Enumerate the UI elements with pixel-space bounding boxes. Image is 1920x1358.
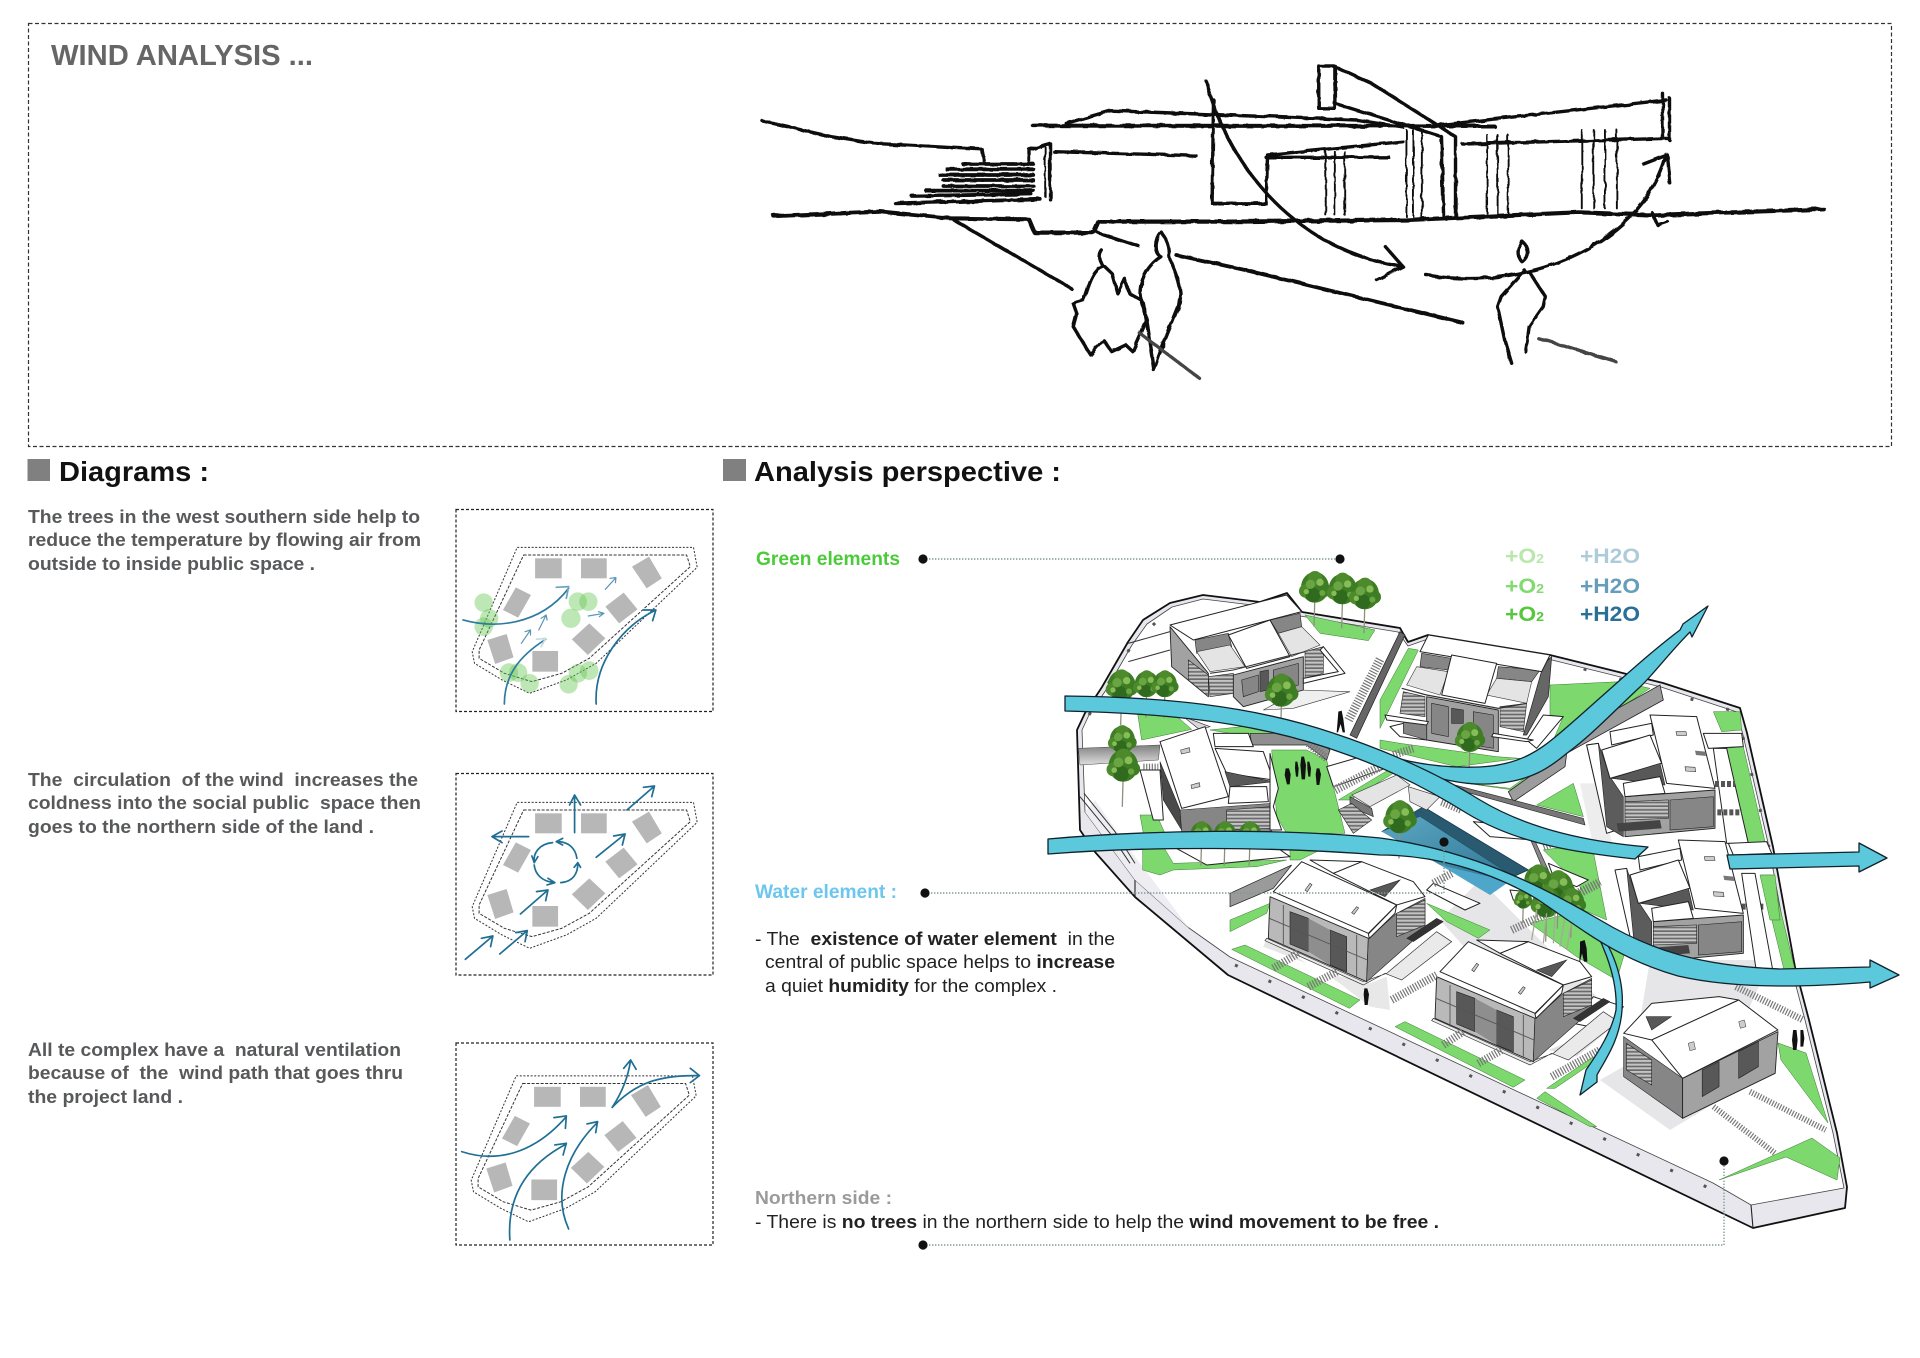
leader: northern side (918, 1156, 1729, 1250)
text block: water element description: - The existence of water element in the (755, 928, 1115, 949)
diagram 3 wind arrows (462, 1060, 699, 1240)
right side green strips (1719, 875, 1840, 1180)
plaza slabs (1327, 752, 1410, 833)
text block: circulation: coldness into the social public space then (28, 793, 421, 813)
label: northern side: Northern side : (755, 1187, 892, 1208)
stairs (1348, 659, 1380, 721)
heading icon: analysis square (723, 459, 746, 481)
wind ribbon: branch to lower centre (1580, 910, 1622, 1095)
greens (1137, 615, 1393, 875)
panel: wind analysis sketch frame (28, 24, 1892, 446)
label: water element: Water element : (755, 881, 897, 903)
text block: circulation: The circulation of the wind increases the (28, 770, 418, 790)
leader: water element (920, 837, 1449, 898)
text block: trees: outside to inside public space . (28, 554, 315, 574)
pool (1382, 807, 1528, 895)
house 2 (1385, 635, 1563, 775)
ground shadows (1085, 800, 1770, 1130)
house 3 (1140, 727, 1290, 865)
paths right of houses (1703, 733, 1773, 973)
text block: circulation: goes to the northern side of the land . (28, 817, 374, 837)
panel: diagram 3 ventilation (456, 1043, 713, 1245)
+O2 column: +O2 (1505, 575, 1544, 598)
gray retaining wall (1230, 865, 1292, 907)
+H2O column: +H2O (1580, 545, 1640, 568)
text block: trees: reduce the temperature by flowing air from (28, 530, 421, 550)
plaza slabs right (1393, 743, 1617, 893)
stairs (1273, 873, 1600, 1077)
text block: northern side description: - There is no trees in the northern side to help the wind movement to be free . (755, 1211, 1439, 1232)
wind ribbon: branch rising to upper right (1393, 606, 1708, 784)
heading: Diagrams: Diagrams : (59, 456, 209, 487)
heading icon: diagrams square (28, 459, 50, 481)
text block: natural ventilation (28, 1040, 403, 1107)
lower greens (1230, 903, 1627, 1127)
+O2 column (1505, 545, 1544, 626)
label: green elements: Green elements (756, 548, 900, 570)
wind ribbon: exit arrow right (1727, 843, 1887, 872)
+O2 column: +O2 (1505, 545, 1544, 568)
heading: Analysis perspective: Analysis perspective : (754, 456, 1061, 487)
text block: natural ventilation: the project land . (28, 1087, 183, 1107)
text block: circulation (28, 770, 421, 837)
house 7 (1432, 940, 1618, 1065)
upper right quarter: house 2, house 4, house 5, pool (1380, 635, 1780, 973)
person on steps (1337, 711, 1345, 732)
text block: water element description (755, 928, 1115, 996)
upper left quarter: house 1, house 3, lawn (1078, 571, 1410, 875)
pad and plaza slabs (1263, 883, 1623, 1057)
house 6 (1265, 860, 1452, 985)
house 8 and stairs (1624, 987, 1826, 1153)
house 1 (1170, 595, 1350, 710)
text block: water element description: central of public space helps to increase (765, 951, 1115, 972)
greens (1380, 648, 1780, 920)
wind ribbon: main top stream (1065, 696, 1648, 859)
tree cluster (1514, 864, 1586, 950)
house 4 (1587, 715, 1715, 837)
pool tree (1383, 800, 1417, 859)
+H2O column: +H2O (1580, 603, 1640, 626)
people group on the lawn (1285, 757, 1321, 785)
leader: green elements (918, 554, 1345, 564)
sketch: section with wind path and people (762, 66, 1824, 378)
+O2 column: +O2 (1505, 603, 1544, 626)
diagram 2 wind arrows (465, 786, 654, 959)
walkway (1447, 783, 1585, 825)
+H2O column: +H2O (1580, 575, 1640, 598)
pedestrians (1364, 940, 1587, 1005)
diagram 1 wind arrows (463, 578, 656, 704)
title: WIND ANALYSIS ... (51, 40, 313, 72)
text block: water element description: a quiet humidity for the complex . (765, 975, 1057, 996)
site base and wall (1077, 593, 1847, 1228)
text block: trees (28, 507, 421, 574)
text block: natural ventilation: All te complex have a natural ventilation (28, 1040, 401, 1060)
panel: diagram 1 trees and wind (456, 510, 713, 712)
retaining walls (1250, 733, 1330, 760)
+H2O column (1580, 545, 1640, 626)
trees (1106, 571, 1381, 866)
panel: diagram 2 circulation (456, 774, 713, 975)
text block: natural ventilation: because of the wind path that goes thru (28, 1063, 403, 1083)
axonometric site model (1048, 571, 1899, 1228)
house 5 (1615, 840, 1743, 962)
wind ribbon: long lower stream (1048, 831, 1899, 988)
lower quarter: houses 6 and 7, pads, stairs (1230, 860, 1627, 1127)
left wall band and lines (1078, 745, 1160, 765)
text block: trees: The trees in the west southern side help to (28, 507, 420, 527)
diagram 1 tree circles (475, 592, 598, 694)
curved retaining wall (1508, 685, 1663, 802)
